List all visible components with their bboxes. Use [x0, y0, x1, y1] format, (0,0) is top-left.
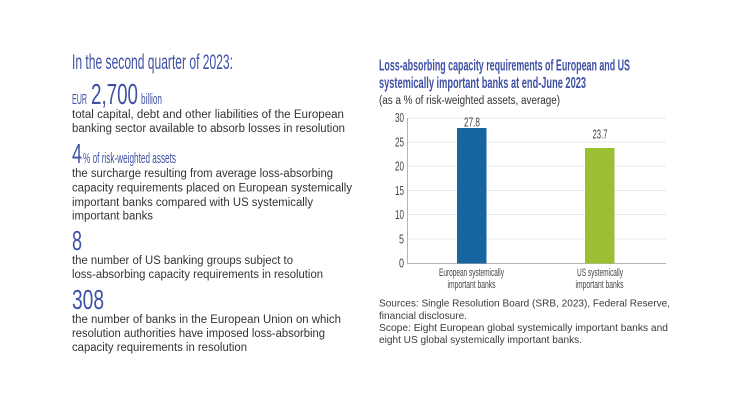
stat block: EUR 2,700 billion: banking sector available to absorb losses in resolution: [72, 123, 345, 135]
x axis label: European: important banks: [448, 279, 496, 291]
bar chart: [395, 111, 666, 291]
y axis labels: 20: [395, 160, 404, 174]
y axis labels: 10: [395, 208, 404, 222]
chart subtitle: (as a % of risk-weighted assets, average): [379, 95, 560, 107]
stat block: 4% of risk-weighted assets: 4: [72, 138, 82, 169]
x axis label: US: [576, 267, 624, 291]
stat block: EUR 2,700 billion: 2,700: [91, 79, 138, 111]
stat block: 4% of risk-weighted assets: important banks: [72, 210, 153, 222]
x axis label: US: important banks: [576, 279, 624, 291]
y axis labels: [395, 111, 404, 270]
sources and scope note: financial disclosure.: [379, 310, 467, 322]
stat block: 8: [72, 225, 323, 281]
x axis label: European: [439, 267, 504, 291]
stat block: 8: 8: [72, 225, 82, 256]
stat block: 308: [72, 284, 341, 354]
x axis label: European: European systemically: [439, 267, 504, 279]
y axis labels: 5: [399, 232, 404, 246]
title: In the second quarter of 2023:: [72, 51, 233, 74]
chart title: [379, 58, 630, 92]
stat block: 4% of risk-weighted assets: the surcharge resulting from average loss-absorbing: [72, 168, 333, 180]
y axis labels: 0: [399, 256, 404, 270]
value label: 23.7: 23.7: [592, 128, 608, 142]
stat block: 8: loss-absorbing capacity requirements in resolution: [72, 269, 323, 281]
sources and scope note: Sources: Single Resolution Board (SRB, 2023), Federal Reserve,: [379, 298, 670, 310]
stat block: EUR 2,700 billion: EUR: [72, 91, 87, 108]
stat block: EUR 2,700 billion: [72, 79, 345, 135]
value label: 27.8: 27.8: [464, 116, 480, 130]
y axis labels: 25: [395, 136, 404, 150]
sources and scope note: [379, 298, 670, 346]
stat block: 308: 308: [72, 284, 104, 315]
stat block: 8: the number of US banking groups subject to: [72, 255, 293, 267]
stat block: 4% of risk-weighted assets: important banks compared with US systemically: [72, 197, 313, 209]
sources and scope note: Scope: Eight European global systemically important banks and: [379, 322, 668, 334]
stat block: 4% of risk-weighted assets: [72, 138, 352, 222]
stat block: 4% of risk-weighted assets: capacity requirements placed on European systemically: [72, 182, 352, 194]
stat block: 308: resolution authorities have imposed loss-absorbing: [72, 328, 325, 340]
chart title: systemically important banks at end-June 2023: [379, 75, 586, 92]
stat block: 4% of risk-weighted assets: % of risk-weighted assets: [83, 150, 176, 167]
stat block: 308: capacity requirements in resolution: [72, 342, 247, 354]
stat block: EUR 2,700 billion: total capital, debt and other liabilities of the European: [72, 109, 344, 121]
y axis labels: 30: [395, 111, 404, 125]
x axis label: US: US systemically: [577, 267, 623, 279]
sources and scope note: eight US global systemically important banks.: [379, 334, 582, 346]
bar: US systemically important banks: [585, 148, 614, 264]
y axis labels: 15: [395, 184, 404, 198]
bar: European systemically important banks: [457, 128, 486, 264]
stat block: EUR 2,700 billion: billion: [141, 91, 162, 108]
stat block: 308: the number of banks in the European Union on which: [72, 314, 341, 326]
